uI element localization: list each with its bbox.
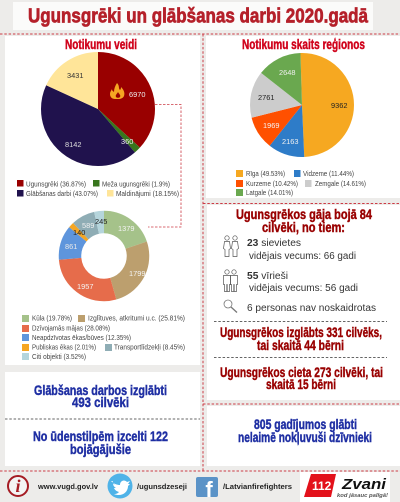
text: women: 23 sievietes <box>247 238 301 249</box>
donut chart: fire locations: 861 <box>65 242 77 251</box>
legend: regions: Vidzeme (11.44%) <box>303 169 354 178</box>
legend: fire locations: Izglītuves, atkritumi u.c. (25.81%) <box>88 314 185 322</box>
legend: fire locations: Publiskas ēkas (2.01%) <box>32 342 96 352</box>
text: men: 55 vīrieši <box>247 271 288 282</box>
legend: regions: Latgale (14.01%) <box>246 188 293 197</box>
panel: animals rescued <box>207 406 400 466</box>
icon: magnifier <box>224 300 237 312</box>
panel: casualties <box>207 205 400 400</box>
donut chart: fire locations: 245 <box>95 217 107 226</box>
legend: incident types: Ugunsgrēki (36.87%) <box>26 180 86 188</box>
pie chart: incident types: 3431 <box>67 71 83 80</box>
heading: notikumu veidi: Notikumu veidi <box>65 37 137 52</box>
panel: notikumu skaits reģionos <box>206 36 400 198</box>
text: rescued: 493 cilvēki <box>72 394 129 410</box>
legend: regions: Kurzeme (10.42%) <box>246 179 298 188</box>
text: drowned: No ūdenstilpēm izcelti 122 <box>33 428 168 444</box>
text: rescued from fires: tai skaitā 44 bērni <box>257 337 344 353</box>
donut chart: fire locations: 1799 <box>129 269 145 278</box>
text: men average age: vidējais vecums: 56 gadi <box>249 283 358 294</box>
footer <box>8 472 390 502</box>
legend: incident types: Glābšanas darbi (43.07%) <box>26 189 98 198</box>
pie chart: incident types <box>65 71 145 149</box>
logo: 112 zvani: Zvani <box>341 476 387 493</box>
pie chart: regions: 1969 <box>263 121 279 130</box>
pie chart: incident types: 360 <box>121 137 133 146</box>
donut chart: fire locations: 140 <box>73 228 85 237</box>
pie chart: regions: 2648 <box>279 68 295 77</box>
donut chart: fire locations: 1379 <box>118 224 134 233</box>
pie chart: incident types: 6970 <box>129 90 145 99</box>
text: women average age: vidējais vecums: 66 gadi <box>249 251 356 262</box>
text: drowned <box>33 428 168 457</box>
donut chart: fire locations <box>65 217 145 291</box>
icon: facebook: f <box>205 477 213 502</box>
text: rescued <box>34 382 167 410</box>
icon: info: i <box>15 476 21 496</box>
legend: incident types: Meža ugunsgrēki (1.9%) <box>102 180 170 188</box>
legend: fire locations: Kūla (19.78%) <box>32 314 72 322</box>
heading: deaths <box>236 206 372 235</box>
icon: twitter <box>108 474 132 498</box>
arrow: connector from fires to donut <box>148 104 181 227</box>
logo: 112 zvani: kod jāsauc palīgā! <box>337 493 388 499</box>
heading: deaths: cilvēki, no tiem: <box>262 219 345 235</box>
legend: fire locations: Neapdzīvotas ēkas/būves (12.35%) <box>32 333 131 342</box>
text: injured in fires <box>220 364 383 392</box>
legend: regions: Zemgale (14.61%) <box>315 179 366 188</box>
legend: regions: Rīga (49.53%) <box>246 169 285 178</box>
legend: fire locations: Dzīvojamās mājas (28.08%) <box>32 324 110 332</box>
icon: women <box>224 236 238 256</box>
legend: regions <box>236 169 366 197</box>
legend: fire locations <box>22 314 185 361</box>
pie chart: regions: 2163 <box>282 137 298 146</box>
icon: facebook <box>196 477 218 502</box>
logo: 112 zvani: 112 <box>312 479 332 493</box>
panel: animals rescued: 805 gadījumos glābti <box>254 416 357 432</box>
pie chart: regions: 9362 <box>331 101 347 110</box>
text: injured in fires: skaitā 15 bērni <box>266 376 336 392</box>
text: website: www.vugd.gov.lv <box>37 482 99 491</box>
legend: fire locations: Citi objekti (3.52%) <box>32 352 86 361</box>
text: facebook handle: /Latvianfirefighters <box>223 482 292 491</box>
panel: rescue work <box>5 372 200 466</box>
text: rescued from fires <box>220 324 382 353</box>
text: unidentified: 6 personas nav noskaidrotas <box>247 303 376 314</box>
icon: flame <box>110 83 124 99</box>
text: drowned: bojāgājušie <box>70 441 131 457</box>
pie chart: incident types: 8142 <box>65 140 81 149</box>
logo: 112 zvani <box>300 472 390 502</box>
donut chart: fire locations: 589 <box>82 221 94 230</box>
legend: incident types <box>17 180 179 198</box>
pie chart: regions: 2761 <box>258 93 274 102</box>
legend: fire locations: Transportlīdzekļi (8.45%) <box>114 342 185 352</box>
icon: men <box>224 270 238 292</box>
pie chart: regions <box>258 68 347 146</box>
panel: notikumu veidi <box>5 36 200 365</box>
icon: info <box>8 476 28 496</box>
donut chart: fire locations: 1957 <box>77 282 93 291</box>
legend: incident types: Maldinājumi (18.15%) <box>116 189 179 198</box>
text: twitter handle: /ugunsdzeseji <box>137 482 187 491</box>
text: rescued: Glābšanas darbos izglābti <box>34 382 167 398</box>
